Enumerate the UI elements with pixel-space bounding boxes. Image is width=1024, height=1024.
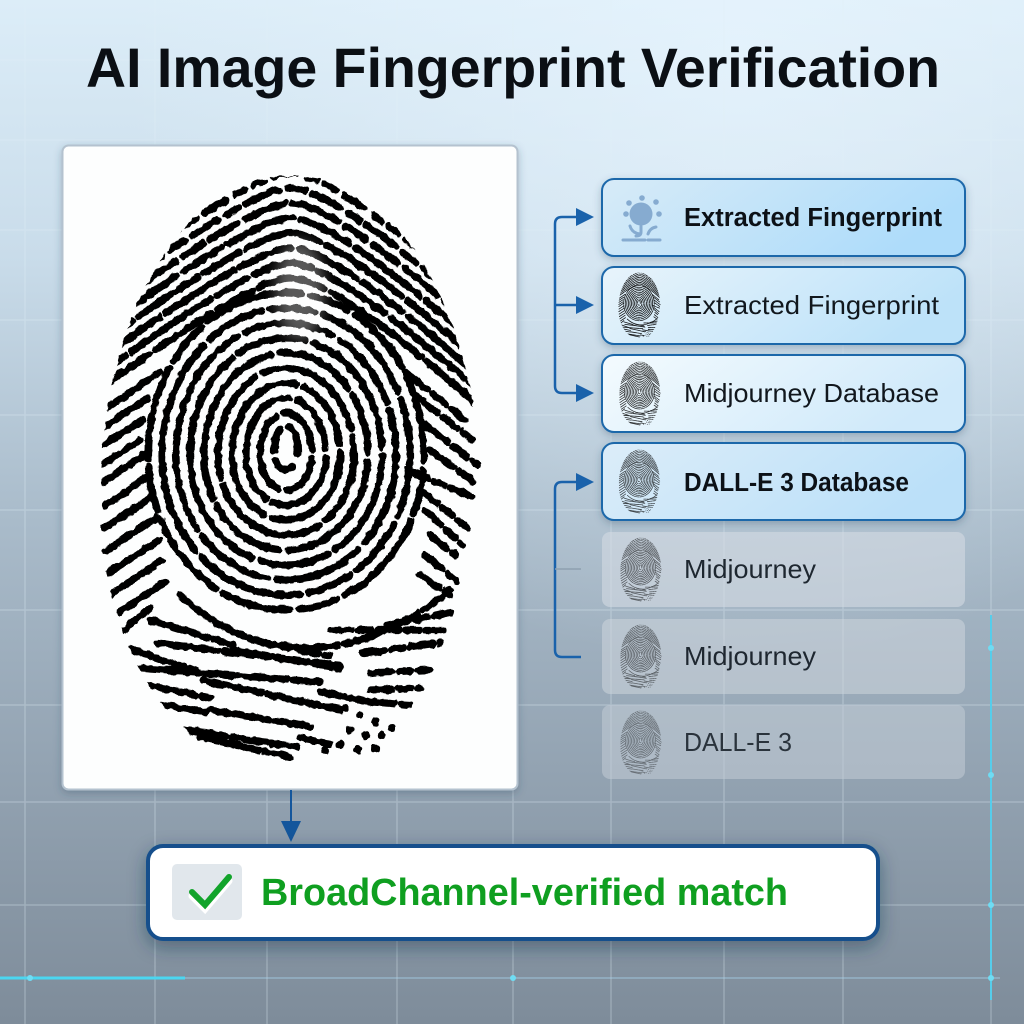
icon: fingerprint (616, 537, 666, 601)
icon: fingerprint (614, 449, 664, 513)
card: DALL-E 3 (muted) (602, 705, 965, 779)
card: DALL-E 3 Database (bold): DALL-E 3 Database (684, 469, 909, 497)
icon: green check (172, 864, 242, 920)
fingerprint image (60, 173, 520, 757)
card: Midjourney (muted): Midjourney (684, 554, 816, 584)
result box (148, 846, 878, 939)
card: Midjourney (muted) (602, 619, 965, 694)
card: DALL-E 3 (muted): DALL-E 3 (684, 727, 792, 757)
icon: AI chip node (623, 195, 662, 240)
connector: panel to list (483, 419, 542, 421)
connector: upper bracket with arrows (555, 208, 594, 402)
icon: fingerprint (615, 361, 665, 425)
card: Midjourney Database (602, 355, 965, 432)
title: AI Image Fingerprint Verification (86, 36, 940, 99)
card: DALL-E 3 Database (bold) (602, 443, 965, 520)
card: Midjourney (muted): Midjourney (684, 641, 816, 671)
icon: fingerprint (616, 624, 666, 688)
card: Extracted Fingerprint (bold): Extracted Fingerprint (684, 204, 942, 232)
panel: main fingerprint (60, 146, 520, 790)
card: Extracted Fingerprint: Extracted Fingerprint (684, 290, 940, 320)
icon: fingerprint (614, 272, 665, 337)
card: Extracted Fingerprint (602, 267, 965, 344)
icon: fingerprint (616, 710, 666, 774)
connector: lower bracket with arrow (555, 473, 594, 657)
card: Extracted Fingerprint (bold) (602, 179, 965, 256)
card: Midjourney (muted) (602, 532, 965, 607)
card: Midjourney Database: Midjourney Database (684, 378, 939, 408)
result text: BroadChannel-verified match (261, 872, 788, 914)
arrow: panel to result (281, 790, 301, 842)
